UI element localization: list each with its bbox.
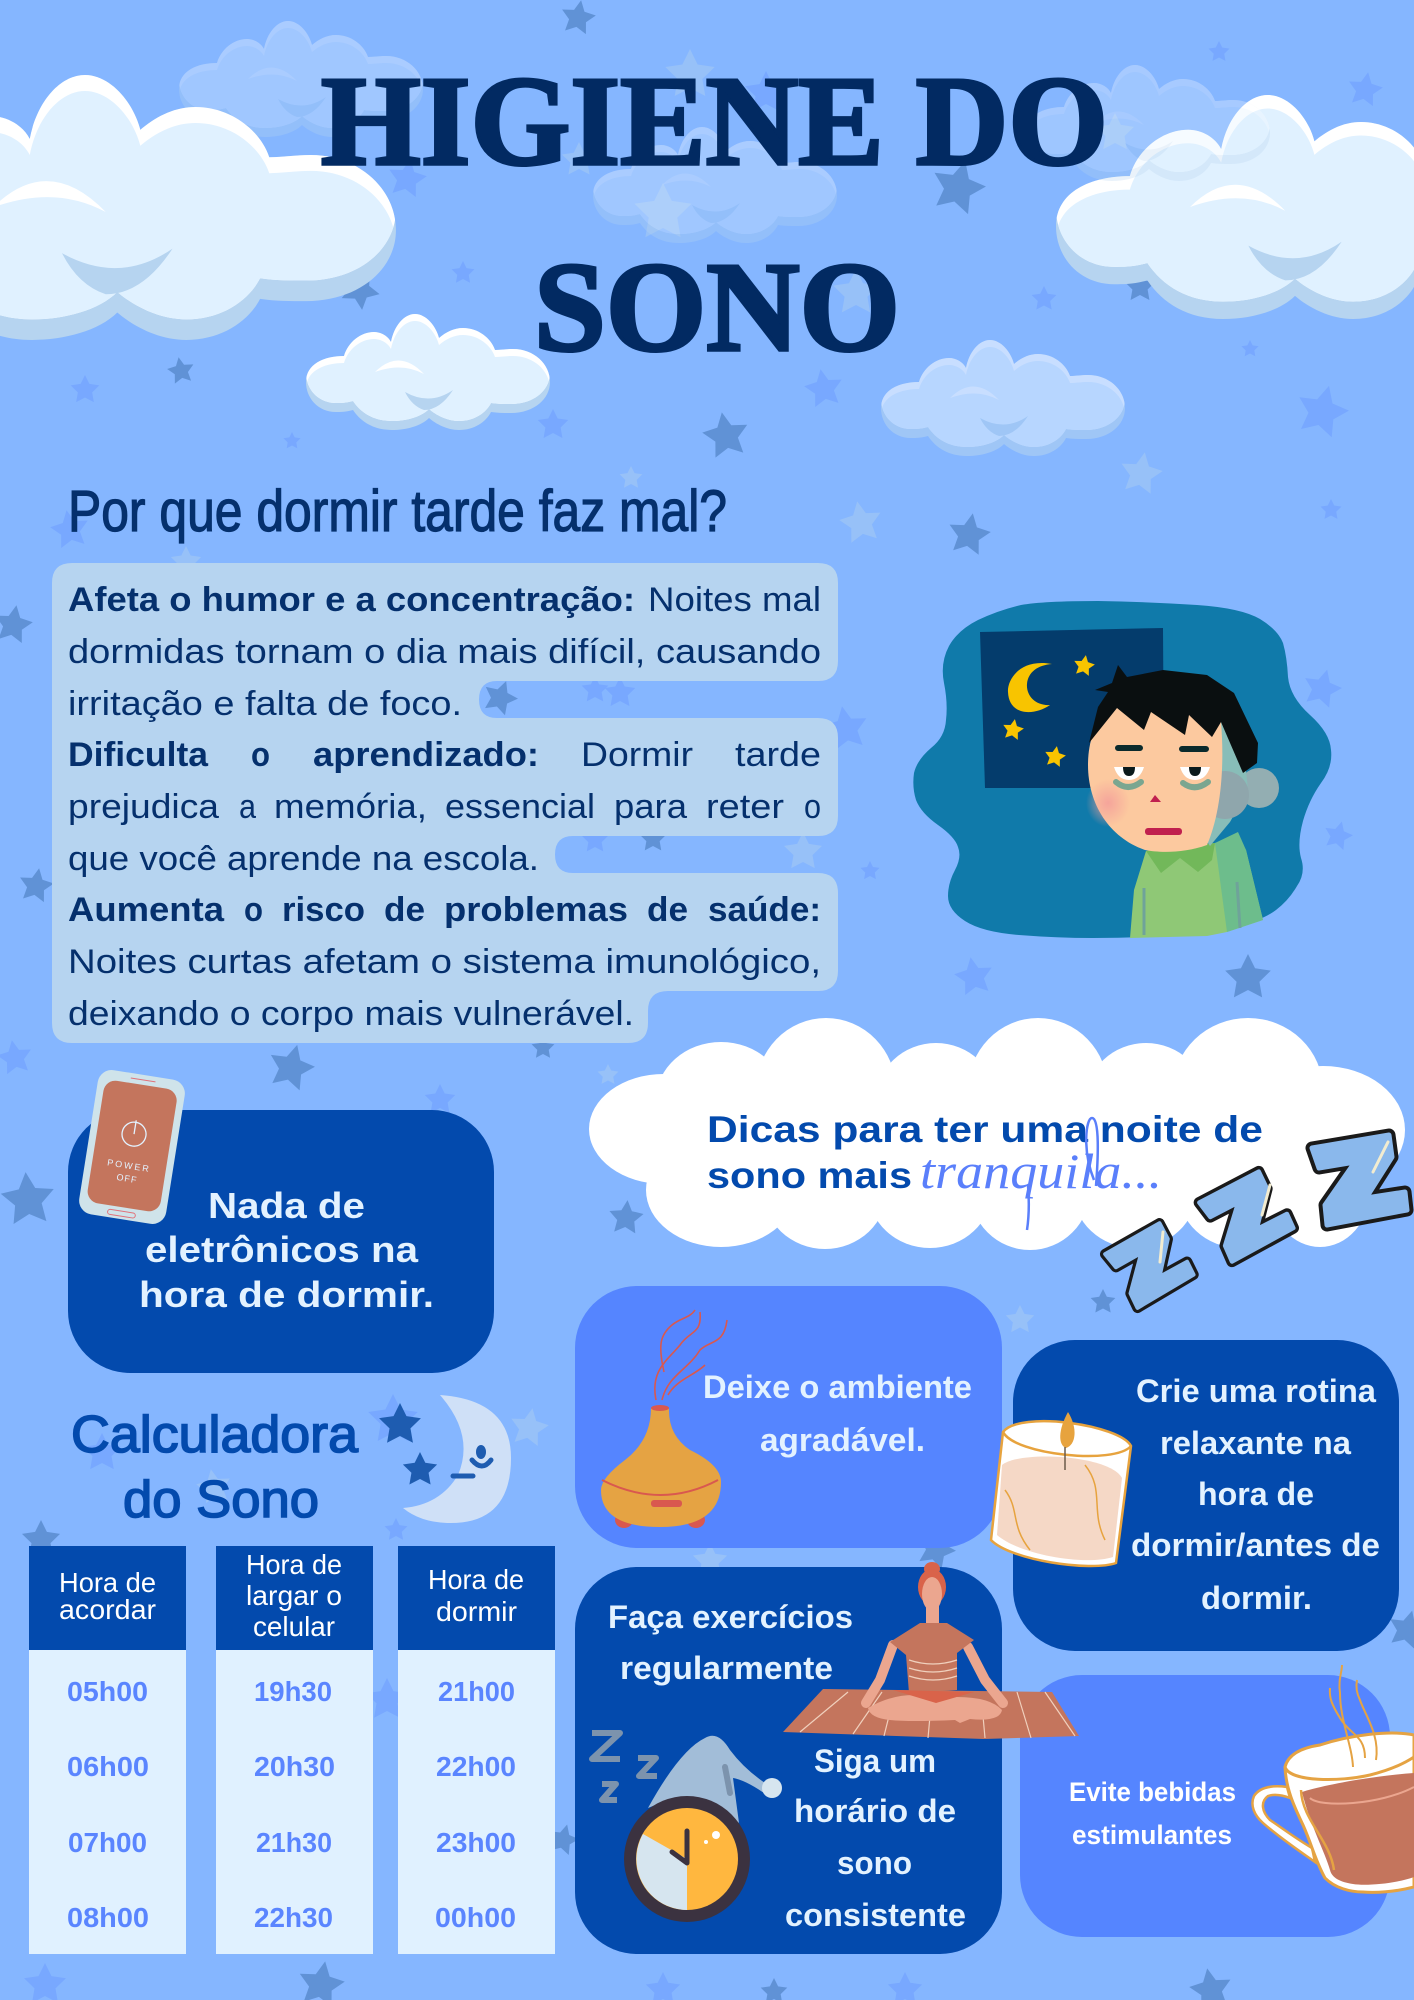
table: wake up time	[29, 1546, 186, 1954]
card text: hora de dormir.	[139, 1274, 434, 1315]
white cloud left	[0, 54, 396, 356]
illustration: woman meditating on mat	[783, 1562, 1079, 1739]
table: put phone away time: largar o	[246, 1580, 342, 1611]
text: learning: Dificulta	[68, 736, 209, 774]
faded cloud top right	[1026, 56, 1270, 188]
text: mood and concentration: dormidas tornam o dia mais difícil, causando	[68, 633, 821, 671]
text: health risks: deixando o corpo mais vulnerável.	[68, 995, 634, 1033]
icon: phone powered off	[77, 1068, 187, 1226]
card text: schedule: horário de	[794, 1793, 956, 1829]
icon: zzz letters	[1102, 1135, 1407, 1312]
heading: why sleeping late is bad: Por que dormir tarde faz mal?	[68, 479, 727, 544]
pale cloud	[881, 331, 1125, 463]
card: pleasant environment	[575, 1286, 1002, 1548]
card text: hora de	[1198, 1476, 1314, 1512]
text: learning: aprendizado:	[313, 736, 539, 774]
table: wake up time: Hora de	[59, 1567, 156, 1598]
card text: Evite bebidas	[1069, 1777, 1236, 1807]
table: wake up time: acordar	[59, 1594, 156, 1625]
title: SONO	[534, 236, 900, 378]
card: exercise and consistent schedule	[575, 1567, 1002, 1954]
card: avoid stimulating drinks	[1020, 1665, 1414, 1937]
table: bedtime	[398, 1546, 555, 1954]
small white cloud	[306, 305, 550, 437]
tips heading: tranquila...	[920, 1143, 1162, 1199]
card text	[703, 1369, 972, 1458]
text: learning: Dormir	[581, 736, 693, 774]
card text: exercise: regularmente	[620, 1650, 833, 1686]
card text	[1069, 1777, 1236, 1850]
table: bedtime: 21h00	[438, 1676, 515, 1707]
text: learning: para	[614, 788, 687, 826]
text: learning: o	[804, 788, 821, 826]
card text: Crie uma rotina	[1136, 1373, 1376, 1409]
card text: estimulantes	[1072, 1820, 1232, 1850]
icon: phone powered off: POWER	[107, 1157, 152, 1174]
table: bedtime: Hora de	[428, 1564, 524, 1595]
text: health risks	[68, 891, 821, 1033]
text: mood and concentration: Afeta o humor e a concentração:	[68, 581, 635, 619]
heading: sleep calculator: Calculadora	[71, 1406, 358, 1464]
heading: sleep calculator: do Sono	[123, 1471, 319, 1529]
card text: relaxante na	[1160, 1425, 1351, 1461]
faded cloud top left	[179, 12, 423, 144]
text: mood and concentration: Noites mal	[648, 581, 821, 619]
text: health risks: de	[647, 891, 688, 929]
table: put phone away time: 21h30	[256, 1827, 332, 1858]
card text: schedule: sono	[837, 1845, 912, 1881]
tips heading: Dicas para ter uma noite de	[707, 1109, 1263, 1150]
text: mood and concentration: irritação e falta de foco.	[68, 685, 462, 723]
card text: schedule: consistente	[785, 1897, 966, 1933]
text: learning: tarde	[735, 736, 821, 774]
card text: dormir.	[1201, 1580, 1312, 1616]
text: learning: reter	[706, 788, 784, 826]
text: health risks: Noites curtas afetam o sistema imunológico,	[68, 943, 821, 981]
text: health risks: problemas	[444, 891, 628, 929]
text: learning	[68, 736, 821, 878]
text: health risks: Aumenta	[68, 891, 225, 929]
heading: sleep calculator	[71, 1406, 358, 1529]
cloud: tips heading background	[589, 1018, 1405, 1250]
illustration: tired boy at night	[913, 601, 1331, 938]
card text: dormir/antes de	[1131, 1527, 1380, 1563]
white cloud right	[1056, 78, 1414, 333]
card text: eletrônicos na	[145, 1229, 419, 1270]
tips heading	[707, 1109, 1263, 1230]
card text	[139, 1185, 434, 1315]
card: no electronics	[68, 1110, 494, 1373]
card text: exercise: Faça exercícios	[608, 1599, 853, 1635]
card: relaxing routine	[991, 1340, 1399, 1651]
table: put phone away time: 19h30	[254, 1676, 332, 1707]
table: bedtime: dormir	[436, 1596, 517, 1627]
table: put phone away time: 20h30	[254, 1751, 335, 1782]
title	[321, 50, 1108, 378]
text: health risks: o	[244, 891, 263, 929]
card text: exercise	[608, 1599, 853, 1686]
card text: Deixe o ambiente	[703, 1369, 972, 1405]
card text	[1131, 1373, 1380, 1616]
panel: reasons	[52, 563, 838, 1043]
table: put phone away time: celular	[253, 1611, 335, 1642]
text: learning: prejudica	[68, 788, 219, 826]
icon: hot drink mug	[1252, 1665, 1414, 1892]
table: bedtime: 23h00	[436, 1827, 516, 1858]
table: put phone away time	[216, 1546, 373, 1954]
table: bedtime: 00h00	[435, 1902, 516, 1933]
table: wake up time: 08h00	[67, 1902, 149, 1933]
text: learning: memória,	[274, 788, 427, 826]
table: wake up time: 06h00	[67, 1751, 149, 1782]
table: bedtime: 22h00	[436, 1751, 516, 1782]
text: learning: o	[251, 736, 270, 774]
text: learning: que você aprende na escola.	[68, 840, 539, 878]
icon: phone powered off: OFF	[116, 1172, 138, 1185]
text: mood and concentration	[68, 581, 821, 723]
table: wake up time: 07h00	[68, 1827, 147, 1858]
text: health risks: risco	[282, 891, 365, 929]
card text: schedule: Siga um	[814, 1743, 936, 1779]
icon: candle	[991, 1412, 1131, 1566]
table: put phone away time: Hora de	[246, 1549, 342, 1580]
icon: aroma diffuser	[601, 1310, 727, 1528]
title: HIGIENE DO	[321, 50, 1108, 192]
text: health risks: de	[384, 891, 425, 929]
faded cloud middle	[593, 118, 837, 250]
card text: agradável.	[760, 1422, 925, 1458]
text: learning: a	[239, 788, 256, 826]
tips heading: sono mais	[707, 1155, 912, 1196]
icon: clock with nightcap	[592, 1733, 782, 1922]
text: health risks: saúde:	[708, 891, 821, 929]
text: learning: essencial	[445, 788, 595, 826]
card text: Nada de	[208, 1185, 365, 1226]
table: wake up time: 05h00	[67, 1676, 148, 1707]
card text: schedule	[785, 1743, 966, 1933]
table: put phone away time: 22h30	[254, 1902, 333, 1933]
icon: sleeping moon	[379, 1395, 511, 1523]
